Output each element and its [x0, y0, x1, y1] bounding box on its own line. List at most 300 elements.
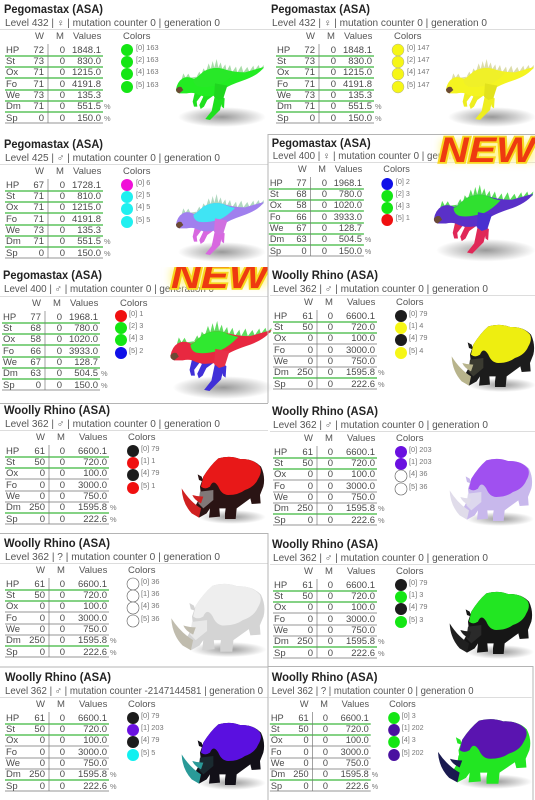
stats table: Dm	[3, 368, 18, 379]
stats table: %	[375, 102, 382, 111]
stats table: We	[277, 90, 291, 101]
panel: Pegomastax blue, new	[269, 136, 535, 256]
color swatches: [4] 5	[136, 202, 150, 211]
stats table: Colors	[128, 699, 156, 710]
stats table: 750.0	[351, 356, 375, 367]
stats table: Fo	[274, 481, 285, 492]
stats table: 0	[60, 713, 65, 724]
stats table: W	[298, 164, 307, 174]
stats table: 0	[57, 368, 62, 379]
stats table: 0	[57, 357, 62, 368]
stats table: %	[378, 637, 385, 646]
stats table: 0	[331, 113, 336, 124]
stats table: Ox	[274, 602, 286, 613]
stats table: Ox	[6, 601, 18, 612]
stats table: %	[104, 237, 111, 246]
stats table: 250	[29, 502, 45, 513]
stats table: 0	[57, 346, 62, 357]
stats table: 720.0	[346, 724, 369, 734]
stats table: 0	[322, 234, 327, 244]
title: Woolly Rhino (ASA)	[4, 403, 110, 417]
stats table	[273, 433, 424, 526]
stats table	[276, 31, 422, 124]
stats table: 3000.0	[346, 345, 375, 356]
stats table: 0	[328, 345, 333, 356]
stats table: 61	[34, 713, 45, 724]
stats table: 810.0	[77, 191, 101, 202]
subtitle: Level 362 | ? | mutation counter 0 | generation 0	[272, 686, 474, 697]
stats table: St	[6, 724, 15, 735]
color swatches: [1] 203	[141, 723, 164, 732]
stats table: W	[35, 31, 44, 42]
stats table	[273, 566, 424, 659]
stats table: 6600.1	[78, 446, 107, 457]
stats table: 1968.1	[334, 178, 362, 188]
stats table: W	[35, 166, 44, 177]
stats table: %	[365, 247, 372, 256]
stats table: 720.0	[351, 458, 375, 469]
stats table: 0	[60, 457, 65, 468]
stats table: 6600.1	[346, 580, 375, 591]
stats table: 0	[328, 492, 333, 503]
stats table: 50	[298, 724, 309, 734]
stats table: 0	[57, 323, 62, 334]
stats table: M	[325, 566, 333, 577]
stats table: %	[372, 782, 379, 791]
stats table: 72	[304, 45, 315, 56]
stats table: 0	[308, 379, 313, 390]
color swatches	[121, 43, 159, 93]
stats table: Values	[342, 699, 369, 709]
color swatches: [2] 3	[129, 321, 143, 330]
color swatches	[115, 309, 143, 359]
stats table: 0	[60, 579, 65, 590]
stats table: 4191.8	[343, 79, 372, 90]
stats table: Values	[347, 297, 376, 308]
stats table: Sp	[6, 781, 18, 792]
stats table: %	[101, 381, 108, 390]
stats table: W	[36, 565, 45, 576]
stats table: M	[327, 31, 335, 42]
color swatches: [1] 202	[402, 723, 424, 732]
stats table: 0	[323, 735, 328, 745]
color swatches	[381, 177, 410, 226]
stats table: 0	[328, 379, 333, 390]
color swatches: [1] 36	[141, 589, 160, 598]
stats table: Ox	[271, 735, 283, 745]
stats table: %	[104, 249, 111, 258]
color swatches: [5] 5	[141, 748, 155, 757]
stats table: 0	[308, 481, 313, 492]
stats table: 250	[29, 635, 45, 646]
stats table: 67	[30, 357, 41, 368]
color swatches: [4] 3	[396, 201, 410, 210]
stats table: 0	[304, 781, 309, 791]
color swatches: [2] 5	[136, 190, 150, 199]
color swatches: [4] 147	[407, 67, 430, 76]
stats table: 0	[60, 468, 65, 479]
stats table: %	[110, 515, 117, 524]
color swatches: [5] 36	[141, 614, 160, 623]
color swatches: [4] 36	[141, 601, 160, 610]
stats table: 0	[322, 246, 327, 256]
color swatches: [1] 1	[141, 456, 155, 465]
stats table: 1595.8	[346, 367, 375, 378]
stats table: 0	[328, 367, 333, 378]
stats table: 58	[296, 200, 307, 210]
stats table: 0	[57, 312, 62, 323]
stats table: 71	[33, 202, 44, 213]
stats table: Colors	[396, 297, 424, 308]
stats table: Values	[70, 298, 99, 309]
stats table: 0	[60, 624, 65, 635]
stats table: 73	[33, 225, 44, 236]
stats table: M	[325, 297, 333, 308]
stats table: %	[110, 503, 117, 512]
color swatches: [1] 203	[409, 457, 432, 466]
stats table: 250	[297, 636, 313, 647]
stats table: 3000.0	[78, 747, 107, 758]
stats table: 1968.1	[69, 312, 98, 323]
stats table: We	[6, 225, 20, 236]
color swatches: [0] 3	[402, 711, 416, 720]
stats table: 750.0	[83, 491, 107, 502]
stats table: 780.0	[74, 323, 98, 334]
stats table: 150.0	[348, 113, 372, 124]
stats table: 0	[60, 180, 65, 191]
stats table	[5, 699, 156, 792]
stats table: Ox	[270, 200, 282, 210]
stats table: Sp	[6, 647, 18, 658]
stats table: 3000.0	[78, 613, 107, 624]
stats table: 50	[34, 590, 45, 601]
stats table: 0	[39, 248, 44, 259]
stats table: 73	[33, 56, 44, 67]
panel: Woolly Rhino green black	[270, 537, 535, 659]
stats table: 58	[30, 334, 41, 345]
color swatches: [5] 2	[129, 346, 143, 355]
stats table: 135.3	[348, 90, 372, 101]
stats table: 750.0	[351, 625, 375, 636]
stats table: HP	[3, 312, 16, 323]
stats table: M	[320, 699, 328, 709]
stats table: St	[270, 189, 279, 199]
creature: green violet rhino	[438, 719, 532, 789]
panel: Woolly Rhino violet	[0, 670, 268, 792]
stats table: %	[378, 380, 385, 389]
stats table: 50	[34, 724, 45, 735]
stats table: 222.6	[83, 514, 107, 525]
stats table: 0	[40, 647, 45, 658]
stats table: 0	[60, 45, 65, 56]
stats table: 0	[60, 735, 65, 746]
stats table: 0	[323, 758, 328, 768]
stats table: 0	[304, 735, 309, 745]
subtitle: Level 362 | ♂ | mutation counter 0 | generation 0	[5, 419, 220, 430]
creature: violet rhino	[182, 723, 266, 790]
stats table: Sp	[6, 248, 18, 259]
stats table: HP	[6, 45, 19, 56]
panel: Pegomastax red, new	[0, 268, 268, 391]
stats table: 0	[40, 624, 45, 635]
stats table: 0	[308, 345, 313, 356]
stats table: 720.0	[83, 724, 107, 735]
stats table: 0	[328, 648, 333, 659]
stats table: 1020.0	[69, 334, 98, 345]
color swatches: [0] 1	[129, 309, 143, 318]
stats table: %	[372, 770, 379, 779]
stats table: We	[6, 491, 20, 502]
stats table: 135.3	[77, 90, 101, 101]
stats table: Colors	[394, 31, 422, 42]
stats table: 71	[304, 101, 315, 112]
stats table: HP	[274, 580, 287, 591]
stats table: 0	[323, 769, 328, 779]
stats table: St	[274, 322, 283, 333]
stats table: 504.5	[339, 234, 362, 244]
color swatches: [0] 6	[136, 178, 150, 187]
stats table: 551.5	[77, 236, 101, 247]
stats table: %	[378, 516, 385, 525]
stats table: %	[378, 504, 385, 513]
stats table: 73	[304, 56, 315, 67]
stats table: Values	[79, 565, 108, 576]
stats table: 1728.1	[72, 180, 101, 191]
stats table: Dm	[6, 236, 21, 247]
stats table: %	[378, 368, 385, 377]
panel: Pegomastax green	[0, 2, 268, 124]
stats table: 0	[328, 311, 333, 322]
color swatches: [5] 1	[141, 481, 155, 490]
stats table: 0	[60, 248, 65, 259]
stats table: 100.0	[83, 601, 107, 612]
stats table: 77	[296, 178, 307, 188]
stats table	[5, 432, 156, 525]
color swatches: [5] 163	[136, 80, 159, 89]
stats table: 0	[60, 67, 65, 78]
stats table: 0	[331, 101, 336, 112]
stats table: 71	[33, 214, 44, 225]
subtitle: Level 425 | ♂ | mutation counter 0 | generation 0	[5, 153, 220, 164]
color swatches: [1] 4	[409, 321, 423, 330]
color swatches	[395, 445, 432, 495]
stats table: 0	[308, 492, 313, 503]
stats table: M	[56, 166, 64, 177]
stats table: Sp	[274, 515, 286, 526]
stats table: M	[53, 298, 61, 309]
stats table: 50	[302, 458, 313, 469]
stats table: Colors	[396, 566, 424, 577]
stats table: Values	[73, 166, 102, 177]
stats table: 750.0	[351, 492, 375, 503]
stats table: W	[304, 433, 313, 444]
stats table: Values	[73, 31, 102, 42]
stats table: Fo	[271, 747, 282, 757]
stats table: 3000.0	[346, 481, 375, 492]
stats table: 551.5	[77, 101, 101, 112]
stats table: 0	[60, 601, 65, 612]
stats table: We	[274, 356, 288, 367]
stats table: Fo	[6, 214, 17, 225]
color swatches: [4] 36	[409, 469, 428, 478]
stats table: 0	[60, 236, 65, 247]
stats table: St	[3, 323, 12, 334]
stats table	[5, 166, 151, 259]
stats table: 780.0	[339, 189, 362, 199]
color swatches: [5] 4	[409, 346, 423, 355]
stats table: 100.0	[351, 602, 375, 613]
stats table: 0	[40, 781, 45, 792]
stats table: We	[6, 90, 20, 101]
color swatches: [2] 147	[407, 55, 430, 64]
stats table: 0	[323, 713, 328, 723]
stats table: 1848.1	[72, 45, 101, 56]
stats table: 0	[328, 591, 333, 602]
stats table: 135.3	[77, 225, 101, 236]
stats table: 551.5	[348, 101, 372, 112]
stats table: 0	[60, 758, 65, 769]
color swatches	[392, 43, 430, 93]
stats table: 150.0	[74, 380, 98, 391]
title: Pegomastax (ASA)	[4, 2, 103, 16]
stats table: 50	[34, 457, 45, 468]
stats table: 0	[39, 113, 44, 124]
stats table: 6600.1	[346, 447, 375, 458]
stats table: 100.0	[351, 333, 375, 344]
creature: green black rhino	[450, 592, 534, 659]
stats table: Sp	[6, 113, 18, 124]
creature: purple white rhino	[450, 459, 534, 526]
color swatches: [0] 147	[407, 43, 430, 52]
color swatches: [0] 36	[141, 577, 160, 586]
stats table: 0	[57, 334, 62, 345]
stats table: 67	[296, 223, 307, 233]
stats table: 0	[328, 458, 333, 469]
stats table: We	[3, 357, 17, 368]
color swatches	[395, 309, 428, 359]
stats table: 6600.1	[346, 311, 375, 322]
stats table: 0	[60, 56, 65, 67]
stats table: 0	[331, 79, 336, 90]
creature: red rhino	[182, 457, 266, 524]
stats table: %	[104, 114, 111, 123]
color swatches: [5] 3	[409, 615, 423, 624]
panel: Woolly Rhino red	[0, 403, 268, 525]
stats table: 66	[296, 212, 307, 222]
stats table: 50	[302, 322, 313, 333]
stats table: 4191.8	[72, 214, 101, 225]
stats table: 0	[328, 469, 333, 480]
color swatches: [5] 5	[136, 215, 150, 224]
stats table: 0	[60, 79, 65, 90]
subtitle: Level 432 | ♀ | mutation counter 0 | generation 0	[272, 18, 487, 29]
stats table: 0	[328, 481, 333, 492]
stats table: 0	[60, 191, 65, 202]
stats table: 1595.8	[78, 635, 107, 646]
stats table: St	[6, 590, 15, 601]
stats table: Fo	[274, 614, 285, 625]
panel: Pegomastax yellow	[268, 2, 535, 124]
stats table: 61	[302, 311, 313, 322]
stats table: 71	[33, 67, 44, 78]
stats table: 0	[308, 515, 313, 526]
stats table: 750.0	[83, 624, 107, 635]
creature: white rhino	[171, 584, 267, 657]
stats table: M	[57, 699, 65, 710]
stats table	[2, 298, 148, 391]
stats table: 0	[310, 113, 315, 124]
stats table: 250	[297, 367, 313, 378]
stats table: 0	[322, 200, 327, 210]
panel: Woolly Rhino white	[0, 536, 268, 658]
stats table: Ox	[6, 468, 18, 479]
stats table: Colors	[120, 298, 148, 309]
stats table: 71	[33, 236, 44, 247]
stats table: Ox	[274, 469, 286, 480]
stats table: 0	[328, 602, 333, 613]
stats table: Colors	[123, 31, 151, 42]
stats table: 0	[60, 769, 65, 780]
stats table: 61	[302, 580, 313, 591]
stats table: Dm	[6, 101, 21, 112]
stats table: We	[270, 223, 283, 233]
color swatches	[395, 578, 428, 628]
stats table: M	[56, 31, 64, 42]
stats table: 63	[296, 234, 307, 244]
stats table: Colors	[123, 166, 151, 177]
panel: Woolly Rhino green violet	[269, 670, 532, 791]
stats table: 61	[34, 579, 45, 590]
stats table: 0	[328, 580, 333, 591]
stats table: 0	[60, 101, 65, 112]
title: Pegomastax (ASA)	[3, 268, 102, 282]
stats table: 66	[30, 346, 41, 357]
stats table: 0	[36, 380, 41, 391]
stats table: M	[57, 565, 65, 576]
stats table	[269, 164, 410, 256]
stats table: 3000.0	[346, 614, 375, 625]
stats table: Fo	[274, 345, 285, 356]
creature: cyan pegomastax	[176, 194, 266, 262]
stats table: %	[101, 369, 108, 378]
stats table: 73	[304, 90, 315, 101]
stats table: HP	[277, 45, 290, 56]
stats table: Values	[347, 433, 376, 444]
stats table: W	[304, 566, 313, 577]
stats table: HP	[274, 447, 287, 458]
panel: Woolly Rhino purple white	[270, 404, 535, 526]
stats table: 0	[57, 380, 62, 391]
stats table: Fo	[6, 747, 17, 758]
stats table: 100.0	[83, 735, 107, 746]
title: Woolly Rhino (ASA)	[5, 670, 111, 684]
stats table: 150.0	[77, 113, 101, 124]
stats table: 504.5	[74, 368, 98, 379]
stats table: 222.6	[83, 781, 107, 792]
stats table: %	[110, 782, 117, 791]
subtitle: Level 362 | ♂ | mutation counter 0 | generation 0	[273, 553, 488, 564]
stats table: 0	[308, 648, 313, 659]
color swatches	[127, 577, 160, 627]
subtitle: Level 362 | ♂ | mutation counter 0 | generation 0	[273, 284, 488, 295]
stats table: 6600.1	[341, 713, 369, 723]
title: Pegomastax (ASA)	[271, 2, 370, 16]
stats table: Ox	[3, 334, 15, 345]
stats table: 1020.0	[334, 200, 362, 210]
subtitle: Level 400 | ♀ | mutation counter 0 | generation 0	[273, 151, 482, 162]
stats table: 0	[331, 45, 336, 56]
stats table: Values	[79, 699, 108, 710]
